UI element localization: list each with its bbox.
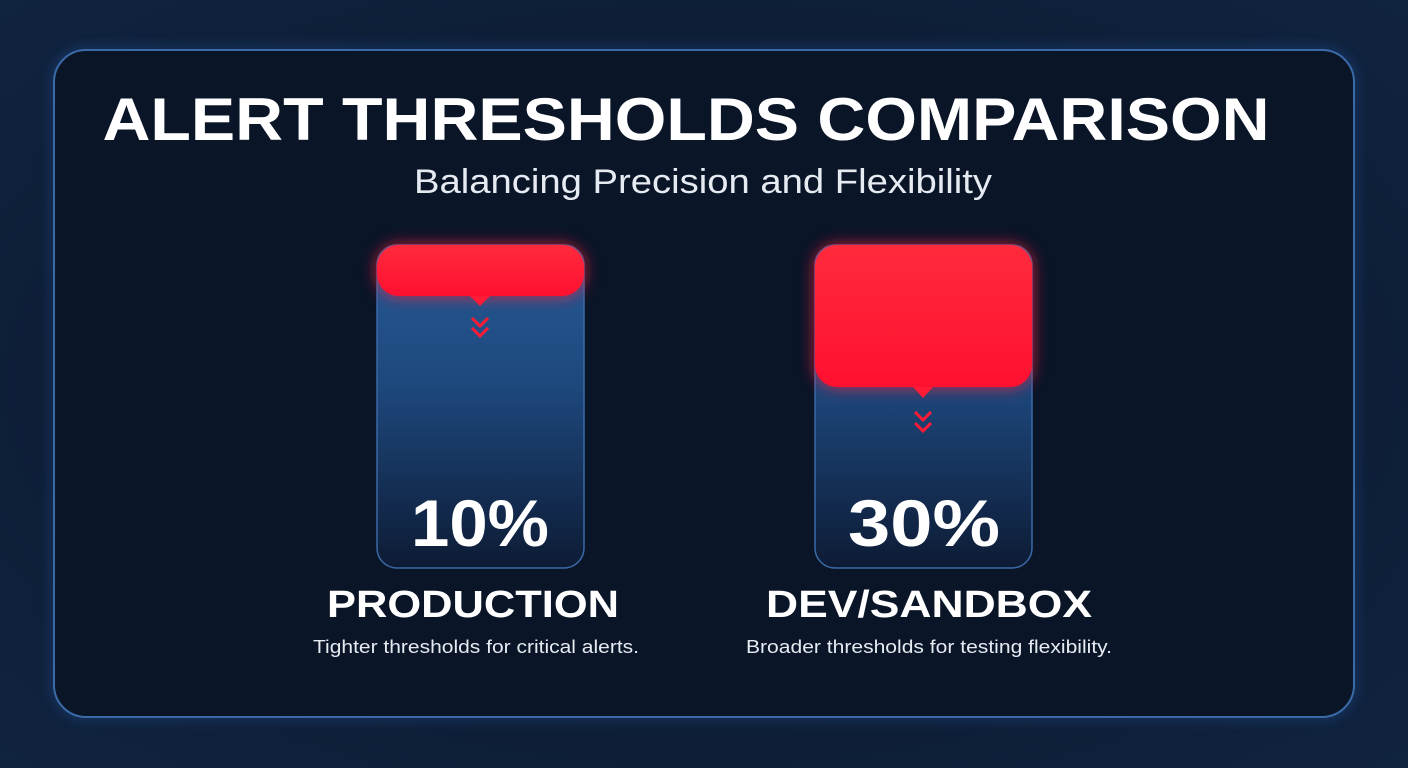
label: production: PRODUCTION bbox=[327, 584, 619, 626]
threshold band: dev bbox=[815, 245, 1032, 398]
label: dev/sandbox bbox=[746, 584, 1112, 657]
threshold band: production bbox=[377, 245, 584, 306]
panel: production bar bbox=[377, 245, 584, 568]
value: 30%: 30% bbox=[848, 486, 1000, 560]
label: dev/sandbox: DEV/SANDBOX bbox=[766, 584, 1093, 626]
title: ALERT THRESHOLDS COMPARISON bbox=[102, 86, 1270, 153]
description: dev: Broader thresholds for testing flexibility. bbox=[746, 637, 1112, 657]
icon: chevrons down bbox=[472, 318, 488, 336]
label: production bbox=[313, 584, 639, 657]
value: 10%: 10% bbox=[411, 486, 549, 560]
panel: dev bar bbox=[815, 245, 1032, 568]
description: production: Tighter thresholds for critical alerts. bbox=[313, 637, 639, 657]
subtitle: Balancing Precision and Flexibility bbox=[414, 163, 992, 201]
icon: chevrons down bbox=[915, 412, 931, 431]
